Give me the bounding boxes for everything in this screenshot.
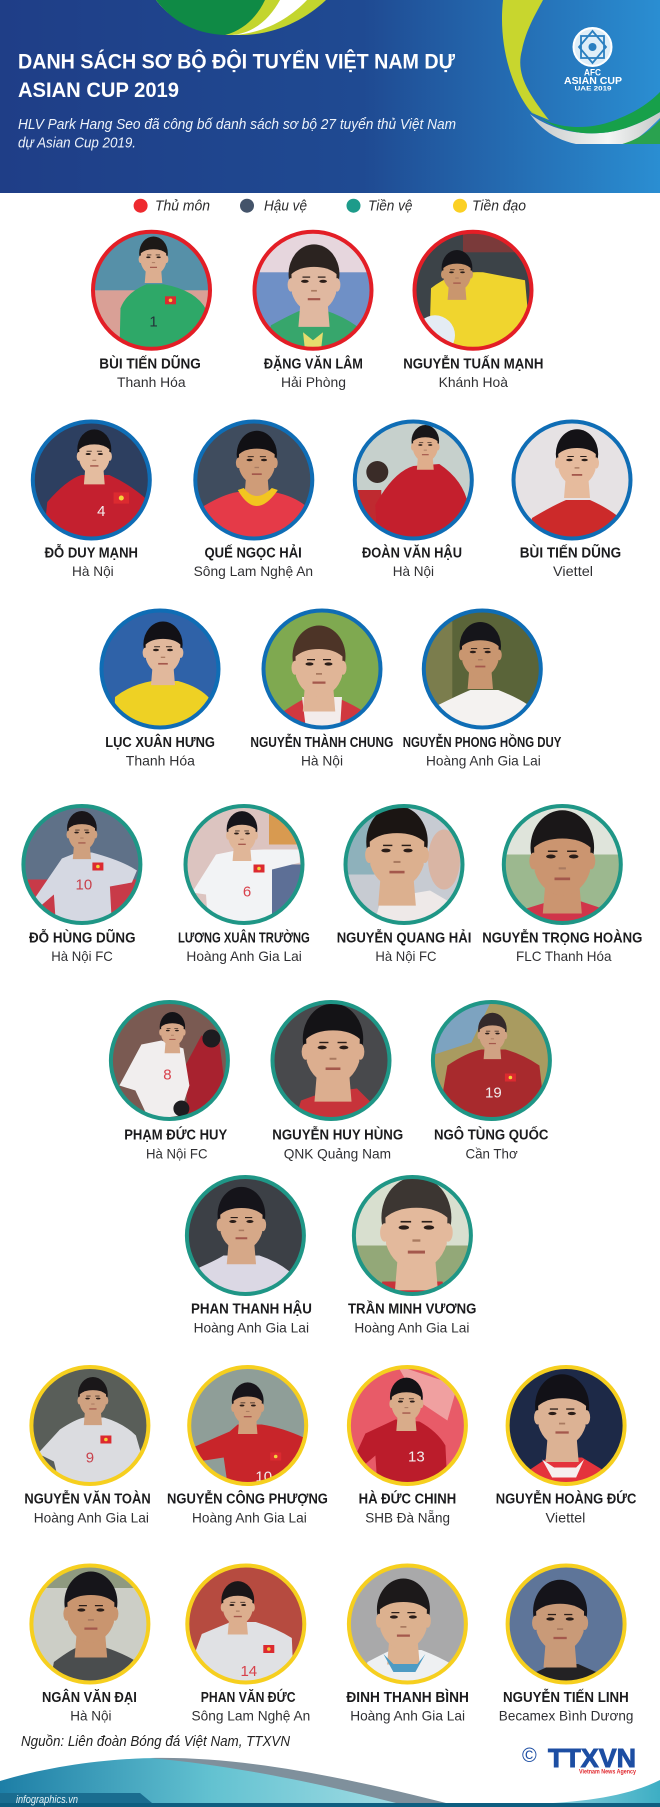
name: BÙI TIẾN DŨNG bbox=[520, 544, 621, 562]
club: Hà Nội bbox=[72, 563, 114, 579]
player: Đoàn Văn Hậu bbox=[353, 420, 473, 579]
top ball decoration bbox=[156, 0, 326, 35]
name: ĐOÀN VĂN HẬU bbox=[362, 544, 462, 562]
club: SHB Đà Nẵng bbox=[365, 1510, 450, 1526]
portrait bbox=[184, 804, 304, 924]
player: Đỗ Hùng Dũng bbox=[22, 804, 142, 964]
title: ASIAN CUP 2019 bbox=[18, 78, 179, 102]
player: Đỗ Duy Mạnh bbox=[31, 420, 151, 579]
name: TRẦN MINH VƯƠNG bbox=[348, 1300, 476, 1318]
name: NGUYỄN VĂN TOÀN bbox=[24, 1490, 151, 1508]
player: Phan Văn Đức bbox=[186, 1564, 310, 1724]
club: Hoàng Anh Gia Lai bbox=[350, 1708, 465, 1724]
name: NGUYỄN HUY HÙNG bbox=[272, 1126, 403, 1144]
TTXVN logo bbox=[522, 1743, 636, 1776]
player: Nguyễn Hoàng Đức bbox=[496, 1366, 637, 1526]
portrait bbox=[194, 420, 314, 540]
player: Nguyễn Văn Toàn bbox=[24, 1366, 151, 1526]
portrait bbox=[431, 1000, 551, 1120]
portrait bbox=[271, 1000, 391, 1120]
portrait bbox=[185, 1176, 305, 1296]
portrait bbox=[100, 609, 220, 729]
portrait bbox=[262, 609, 382, 729]
club: Becamex Bình Dương bbox=[499, 1708, 633, 1724]
title: DANH SÁCH SƠ BỘ ĐỘI TUYỂN VIỆT NAM DỰ bbox=[18, 48, 455, 74]
subtitle: HLV Park Hang Seo đã công bố danh sách sơ bộ 27 tuyển thủ Việt Nam bbox=[18, 116, 456, 133]
club: Sông Lam Nghệ An bbox=[192, 1708, 310, 1724]
portrait bbox=[352, 1176, 472, 1296]
club: Thanh Hóa bbox=[126, 752, 195, 768]
website label: infographics.vn bbox=[16, 1794, 78, 1806]
portrait: 1 bbox=[149, 313, 158, 330]
portrait bbox=[92, 230, 212, 350]
name: LƯƠNG XUÂN TRƯỜNG bbox=[178, 928, 310, 946]
portrait bbox=[253, 230, 373, 350]
AFC Asian Cup logo: AFC bbox=[584, 68, 601, 78]
portrait bbox=[22, 804, 142, 924]
club: Viettel bbox=[553, 563, 593, 579]
player: Lương Xuân Trường bbox=[178, 804, 310, 964]
player: Nguyễn Trọng Hoàng bbox=[482, 804, 642, 964]
portrait bbox=[30, 1564, 150, 1684]
portrait bbox=[31, 420, 151, 540]
player: Ngân Văn Đại bbox=[30, 1564, 150, 1724]
name: NGUYỄN TUẤN MẠNH bbox=[403, 356, 543, 372]
player: Đặng Văn Lâm bbox=[253, 230, 373, 390]
portrait: 4 bbox=[97, 503, 105, 520]
name: NGUYỄN HOÀNG ĐỨC bbox=[496, 1490, 637, 1508]
club: Viettel bbox=[546, 1510, 585, 1526]
name: NGUYỄN TIẾN LINH bbox=[503, 1689, 629, 1706]
player: Nguyễn Tuấn Mạnh bbox=[403, 230, 543, 390]
portrait: 10 bbox=[76, 876, 92, 894]
player: Đinh Thanh Bình bbox=[346, 1564, 469, 1724]
player: Nguyễn Huy Hùng bbox=[271, 1000, 403, 1162]
player: Bùi Tiến Dũng (Thanh Hóa) bbox=[92, 230, 212, 390]
club: Hoàng Anh Gia Lai bbox=[192, 1510, 307, 1526]
name: HÀ ĐỨC CHINH bbox=[359, 1490, 456, 1508]
portrait bbox=[344, 804, 464, 924]
player: Lục Xuân Hưng bbox=[100, 609, 220, 768]
name: NGUYỄN THÀNH CHUNG bbox=[250, 734, 393, 751]
portrait bbox=[506, 1366, 626, 1486]
legend: Thủ môn bbox=[155, 199, 210, 215]
player: Ngô Tùng Quốc bbox=[431, 1000, 551, 1162]
name: ĐINH THANH BÌNH bbox=[346, 1689, 469, 1706]
club: Hà Nội FC bbox=[51, 948, 113, 964]
title bbox=[18, 48, 455, 102]
portrait: 10 bbox=[255, 1468, 272, 1486]
source note: Nguồn: Liên đoàn Bóng đá Việt Nam, TTXVN bbox=[21, 1733, 290, 1750]
portrait: 14 bbox=[240, 1663, 257, 1680]
club: Hoàng Anh Gia Lai bbox=[186, 948, 302, 964]
player: Nguyễn Quang Hải bbox=[337, 804, 471, 964]
subtitle: dự Asian Cup 2019. bbox=[18, 134, 136, 152]
portrait: 13 bbox=[408, 1448, 425, 1466]
player: Phạm Đức Huy bbox=[109, 1000, 229, 1162]
legend bbox=[134, 199, 526, 215]
name: NGUYỄN CÔNG PHƯỢNG bbox=[167, 1490, 328, 1508]
name: NGUYỄN TRỌNG HOÀNG bbox=[482, 930, 642, 946]
name: NGÂN VĂN ĐẠI bbox=[42, 1688, 137, 1706]
name: NGÔ TÙNG QUỐC bbox=[434, 1126, 549, 1144]
portrait bbox=[188, 1366, 308, 1486]
name: BÙI TIẾN DŨNG bbox=[99, 354, 201, 372]
portrait bbox=[353, 420, 473, 540]
player: Hà Đức Chinh bbox=[347, 1366, 467, 1526]
AFC Asian Cup logo bbox=[564, 28, 622, 92]
club: Thanh Hóa bbox=[117, 374, 186, 390]
header banner bbox=[0, 0, 660, 193]
name: QUẾ NGỌC HẢI bbox=[204, 544, 302, 562]
club: Khánh Hoà bbox=[439, 374, 508, 390]
club: Hà Nội bbox=[70, 1708, 112, 1724]
club: Hoàng Anh Gia Lai bbox=[194, 1320, 309, 1336]
portrait bbox=[109, 1000, 229, 1120]
portrait bbox=[512, 420, 632, 540]
name: PHẠM ĐỨC HUY bbox=[124, 1126, 227, 1144]
club: Hà Nội FC bbox=[146, 1146, 208, 1162]
portrait: 8 bbox=[163, 1066, 172, 1084]
name: PHAN VĂN ĐỨC bbox=[201, 1688, 296, 1706]
club: Hà Nội bbox=[301, 752, 343, 768]
name: PHAN THANH HẬU bbox=[191, 1300, 312, 1318]
portrait bbox=[186, 1564, 306, 1684]
name: NGUYỄN QUANG HẢI bbox=[337, 930, 471, 946]
club: Hà Nội bbox=[393, 563, 434, 579]
TTXVN logo: © bbox=[522, 1745, 537, 1767]
name: NGUYỄN PHONG HỒNG DUY bbox=[403, 733, 562, 751]
club: Hà Nội FC bbox=[375, 948, 436, 964]
player: Nguyễn Phong Hồng Duy bbox=[403, 609, 562, 768]
subtitle bbox=[18, 116, 456, 152]
TTXVN logo: Vietnam News Agency bbox=[579, 1768, 636, 1776]
portrait: 9 bbox=[86, 1450, 94, 1466]
player: Trần Minh Vương bbox=[348, 1176, 476, 1336]
name: ĐỖ HÙNG DŨNG bbox=[29, 928, 136, 946]
legend: Hậu vệ bbox=[264, 199, 307, 215]
portrait bbox=[413, 230, 533, 355]
portrait: 19 bbox=[485, 1084, 502, 1102]
player: Phan Thanh Hậu bbox=[185, 1176, 312, 1336]
portrait bbox=[347, 1564, 467, 1684]
player: Bùi Tiến Dũng (Viettel) bbox=[512, 420, 632, 579]
player: Nguyễn Công Phượng bbox=[167, 1366, 328, 1526]
club: Sông Lam Nghệ An bbox=[194, 563, 313, 579]
club: QNK Quảng Nam bbox=[284, 1146, 391, 1162]
club: Hoàng Anh Gia Lai bbox=[354, 1320, 469, 1336]
legend: Tiền vệ bbox=[368, 199, 412, 215]
portrait bbox=[422, 609, 542, 729]
portrait bbox=[347, 1366, 467, 1486]
name: LỤC XUÂN HƯNG bbox=[105, 733, 215, 751]
club: Hoàng Anh Gia Lai bbox=[426, 752, 541, 768]
club: Hoàng Anh Gia Lai bbox=[34, 1510, 149, 1526]
AFC Asian Cup logo: ASIAN CUP bbox=[564, 76, 622, 87]
name: ĐẶNG VĂN LÂM bbox=[264, 354, 363, 372]
player: Nguyễn Tiến Linh bbox=[499, 1564, 633, 1724]
portrait bbox=[502, 804, 622, 924]
footer wave bbox=[0, 1758, 660, 1807]
TTXVN logo: TTXVN bbox=[548, 1743, 636, 1773]
club: Hải Phòng bbox=[281, 374, 346, 390]
legend: Tiền đạo bbox=[472, 199, 526, 215]
name: ĐỖ DUY MẠNH bbox=[45, 544, 138, 562]
portrait: 6 bbox=[243, 884, 251, 900]
club: FLC Thanh Hóa bbox=[516, 948, 612, 964]
portrait bbox=[506, 1564, 626, 1684]
AFC Asian Cup logo: UAE 2019 bbox=[574, 86, 612, 92]
club: Cần Thơ bbox=[466, 1146, 518, 1162]
portrait bbox=[30, 1366, 150, 1486]
player: Nguyễn Thành Chung bbox=[250, 609, 393, 768]
player: Quế Ngọc Hải bbox=[194, 420, 314, 579]
Asian Cup ribbon decoration bbox=[502, 0, 660, 146]
